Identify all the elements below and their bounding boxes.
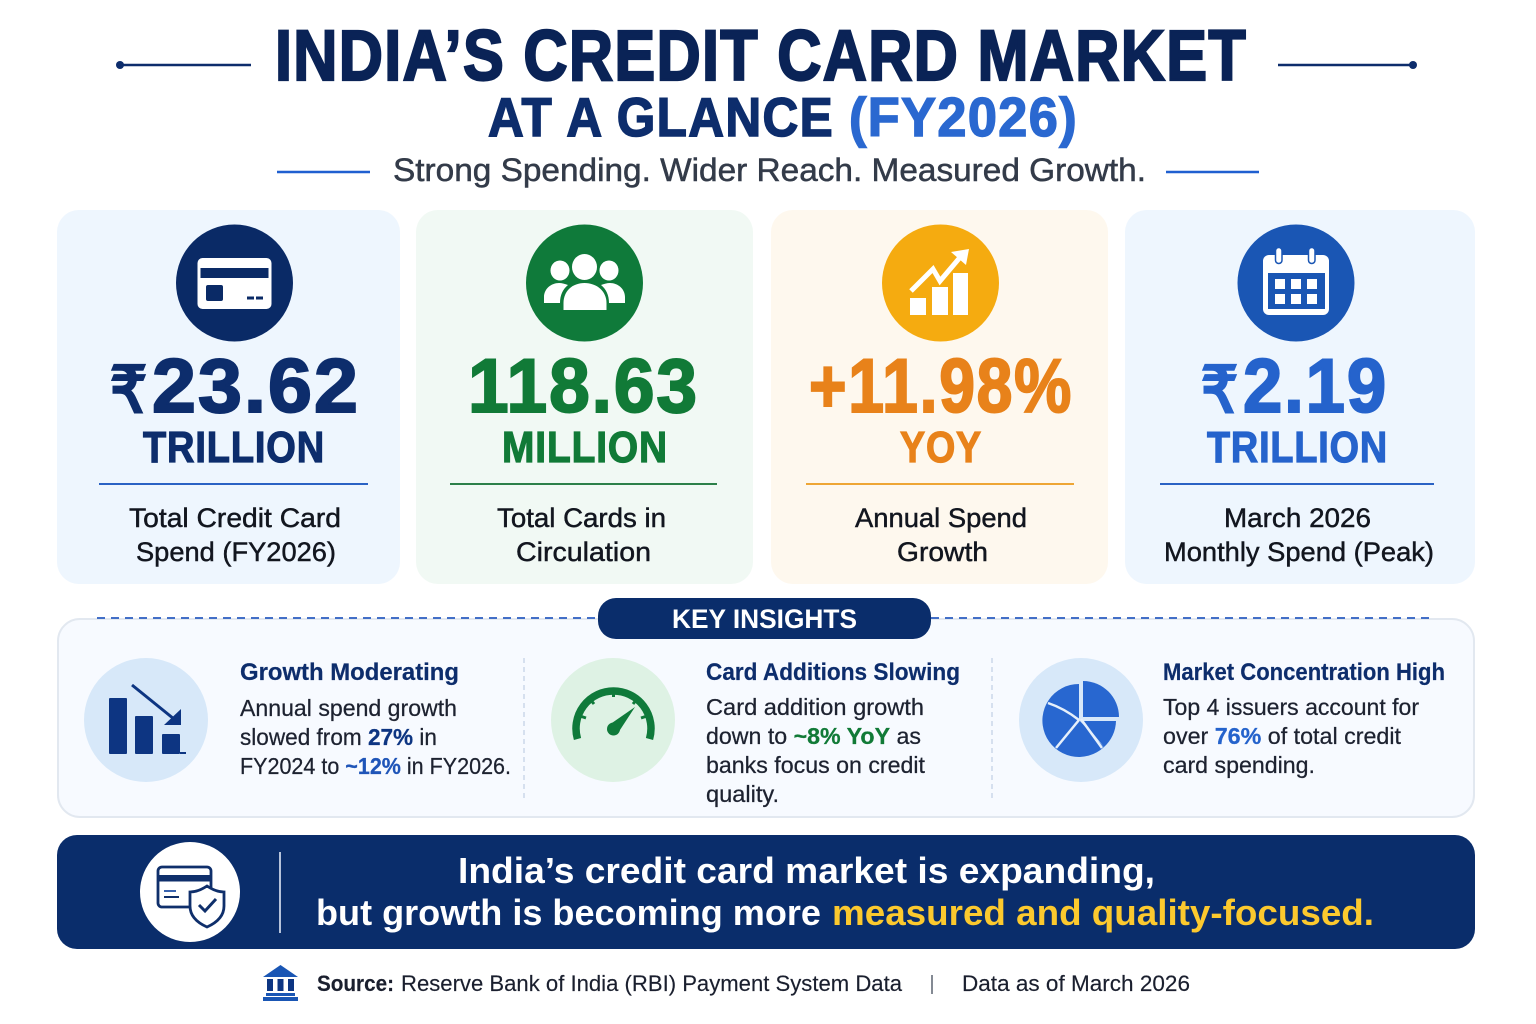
icon: credit card [176,224,293,342]
panel: monthly peak [1125,210,1475,584]
header [116,17,1417,188]
panel: annual growth [771,210,1108,584]
takeaway text: India’s credit card market is expanding, [458,850,1155,891]
value: ₹ [1201,354,1238,426]
description [855,503,1027,567]
description: Circulation [516,537,651,567]
title: INDIA’S CREDIT CARD MARKET [275,17,1247,96]
body text [240,695,511,779]
icon: falling bars [84,658,208,782]
insight: growth moderating [84,658,511,782]
heading: Growth Moderating [240,659,459,686]
panel: total spend [57,210,400,584]
body text: FY2024 to ~12% in FY2026. [240,753,511,779]
value: 23.62 [152,344,360,429]
value: 118.63 [468,344,699,429]
description: Total Credit Card [129,503,341,533]
insight: market concentration [1019,658,1445,782]
unit: MILLION [502,423,668,472]
body text: slowed from 27% in [240,724,437,750]
insight: card additions [551,658,960,807]
body text: Annual spend growth [240,695,457,721]
body text: over 76% of total credit [1163,723,1402,749]
panel: cards in circulation [416,210,753,584]
body text: quality. [706,781,779,807]
icon: people [526,224,643,342]
body text: banks focus on credit [706,752,926,778]
description: Growth [897,537,988,567]
icon: bank [263,965,298,1001]
body text [1163,694,1419,778]
body text: Top 4 issuers account for [1163,694,1419,720]
title line two [488,86,1078,148]
description [129,503,341,567]
takeaway text [316,850,1374,933]
right subtitle rule [1166,171,1259,173]
body text: down to ~8% YoY as [706,723,921,749]
body text: card spending. [1163,752,1315,778]
icon: secure card [140,842,240,942]
value: 2.19 [1243,344,1388,429]
unit: TRILLION [143,423,325,472]
banner: takeaway [57,835,1475,949]
icon: growth chart [882,224,999,342]
icon: speedometer [551,658,675,782]
takeaway text: measured and quality-focused. [832,892,1374,933]
icon: pie chart [1019,658,1143,782]
source text: Source: [317,971,394,996]
left subtitle rule [277,171,370,173]
description: Total Cards in [497,503,666,533]
description: Monthly Spend (Peak) [1164,537,1434,567]
data date: Data as of March 2026 [962,971,1190,996]
description [497,503,666,567]
value: +11.98% [809,344,1073,429]
value: ₹ [110,354,147,426]
body text: Card addition growth [706,694,924,720]
description [1164,503,1434,567]
key insights badge: KEY INSIGHTS [672,604,857,634]
subtitle: Strong Spending. Wider Reach. Measured Growth. [393,152,1146,188]
unit: YOY [900,423,982,472]
footer: source [263,965,1190,1001]
source text: Reserve Bank of India (RBI) Payment System Data [401,971,903,996]
panel: key insights [58,598,1474,817]
heading: Card Additions Slowing [706,659,960,686]
takeaway text: but growth is becoming more [316,892,821,933]
description: March 2026 [1224,503,1371,533]
title line two: AT A GLANCE [488,86,834,148]
description: Spend (FY2026) [136,537,336,567]
body text [706,694,926,807]
key insights badge [598,598,931,639]
unit: TRILLION [1207,423,1388,472]
title line two: (FY2026) [849,86,1078,148]
description: Annual Spend [855,503,1027,533]
right title rule [1278,61,1417,69]
left title rule [116,61,251,69]
heading: Market Concentration High [1163,659,1445,686]
icon: calendar [1238,224,1354,342]
